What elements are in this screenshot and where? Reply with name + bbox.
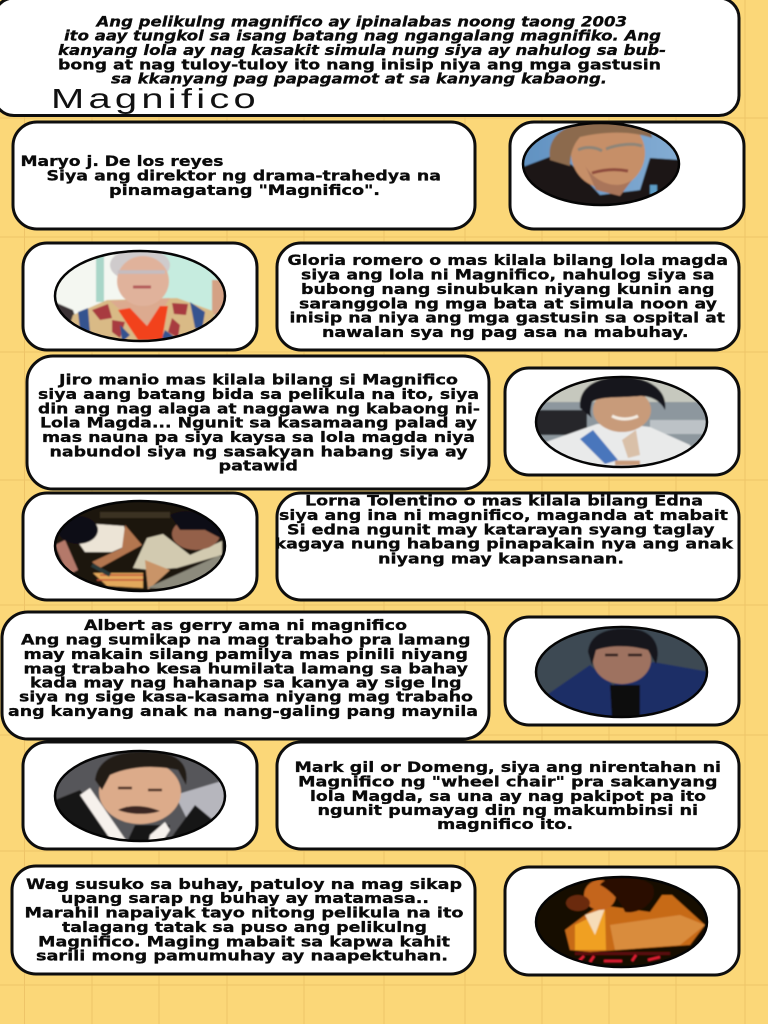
Gloria Romero description: siya ang lola ni Magnifico, nahulog siya sa — [301, 268, 714, 284]
Jiro Manio description: mas nauna pa siya kaysa sa lola magda niya — [42, 430, 475, 446]
intro text: kanyang lola ay nag kasakit simula nung siya ay nahulog sa bub- — [58, 43, 666, 59]
panel: Albert as Gerry photo — [505, 617, 739, 725]
panel: Lorna Tolentino text — [274, 493, 739, 600]
intro text: bong at nag tuloy-tuloy ito nang inisip niya ang mga gastusin — [58, 58, 661, 74]
panel: director text — [13, 122, 475, 229]
panel: Lorna Tolentino photo — [23, 493, 257, 600]
Jiro Manio description: patawid — [218, 458, 298, 474]
Gloria Romero description: inisip na niya ang mga gastusin sa ospital at — [290, 310, 725, 326]
Albert as Gerry description — [8, 618, 478, 720]
Albert as Gerry description: Ang nag sumikap na mag trabaho pra lamang — [21, 632, 470, 648]
Jiro Manio description: siya aang batang bida sa pelikula na ito, siya — [38, 387, 479, 403]
intro text: sa kkanyang pag papagamot at sa kanyang kabaong. — [111, 72, 607, 88]
intro text: ito aay tungkol sa isang batang nag ngangalang magnifiko. Ang — [64, 28, 661, 44]
closing message text: sarili mong pamumuhay ay naapektuhan. — [36, 948, 448, 964]
Jiro Manio description: din ang nag alaga at naggawa ng kabaong ni- — [38, 402, 480, 418]
panel: Albert as Gerry text — [2, 612, 489, 739]
Albert as Gerry description: mag trabaho kesa humilata lamang sa bahay — [24, 662, 468, 678]
Albert as Gerry description: kada may nag hahanap sa kanya ay sige lng — [30, 676, 462, 692]
Jiro Manio description: Jiro manio mas kilala bilang si Magnifico — [58, 372, 458, 388]
Albert as Gerry description: Albert as gerry ama ni magnifico — [84, 618, 407, 634]
photo: Gloria Romero portrait — [50, 248, 230, 346]
closing message text: Marahil napaiyak tayo nitong pelikula na ito — [24, 906, 464, 922]
closing message text: upang sarap ng buhay ay matamasa.. — [61, 891, 429, 907]
Gloria Romero description — [288, 253, 728, 341]
Lorna Tolentino description: siya ang ina ni magnifico, maganda at mabait — [279, 508, 728, 524]
director description: Siya ang direktor ng drama-trahedya na — [46, 168, 441, 184]
panel: Gloria Romero photo — [23, 243, 257, 350]
Gloria Romero description: Gloria romero o mas kilala bilang lola magda — [288, 253, 728, 269]
photo: Jiro Manio portrait — [534, 376, 708, 468]
Mark Gil description: magnifico ito. — [437, 817, 573, 833]
panel: intro — [0, 0, 739, 116]
photo: director portrait — [522, 122, 680, 206]
director description: Maryo j. De los reyes — [20, 154, 223, 170]
Albert as Gerry description: may makain silang pamilya mas pinili niyang — [24, 647, 468, 663]
Mark Gil description: ngunit pumayag din ng makumbinsi ni — [318, 803, 698, 819]
intro text: Ang pelikulng magnifico ay ipinalabas noong taong 2003 — [95, 14, 627, 30]
Mark Gil description — [294, 760, 721, 833]
photo: Mark Gil portrait — [50, 748, 230, 846]
Lorna Tolentino description: Si edna ngunit may katarayan syang taglay — [287, 522, 714, 538]
Lorna Tolentino description: niyang may kapansanan. — [378, 552, 624, 568]
Albert as Gerry description: ang kanyang anak na nang-galing pang maynila — [8, 704, 478, 720]
panel: Mark Gil text — [277, 742, 739, 849]
photo: Albert Martinez portrait — [530, 622, 712, 720]
intro text — [58, 14, 666, 88]
panel: closing message — [12, 866, 475, 974]
heading: Magnifico: Magnifico — [51, 83, 260, 114]
Gloria Romero description: nawalan sya ng pag asa na mabuhay. — [322, 325, 688, 341]
panel: Mark Gil photo — [23, 742, 257, 849]
Jiro Manio description: Lola Magda... Ngunit sa kasamaang palad ay — [40, 416, 477, 432]
closing message text: Magnifico. Maging mabait sa kapwa kahit — [38, 934, 450, 950]
Lorna Tolentino description — [274, 494, 734, 568]
panel: Gloria Romero text — [277, 243, 739, 350]
Mark Gil description: Magnifico ng "wheel chair" pra sakanyang — [298, 774, 718, 790]
director description — [20, 154, 441, 199]
Jiro Manio description — [38, 372, 480, 474]
Lorna Tolentino description: kagaya nung habang pinapakain nya ang anak — [274, 536, 734, 552]
director description: pinamagatang "Magnifico". — [109, 183, 380, 199]
Gloria Romero description: saranggola ng mga bata at simula noon ay — [299, 296, 717, 312]
closing message text — [24, 877, 464, 964]
closing message text: talagang tatak sa puso ang pelikulng — [62, 920, 427, 936]
photo: Magnifico film poster — [530, 872, 712, 970]
panel: film poster photo — [505, 867, 739, 975]
Jiro Manio description: nabundol siya ng sasakyan habang siya ay — [50, 444, 468, 460]
Mark Gil description: lola Magda, sa una ay nag pakipot pa ito — [310, 789, 706, 805]
panel: director photo — [510, 117, 744, 229]
Lorna Tolentino description: Lorna Tolentino o mas kilala bilang Edna — [305, 494, 703, 510]
Mark Gil description: Mark gil or Domeng, siya ang nirentahan ni — [294, 760, 721, 776]
panel: Jiro Manio photo — [505, 368, 739, 475]
panel: Jiro Manio text — [27, 356, 489, 489]
Albert as Gerry description: siya ng sige kasa-kasama niyang mag trabaho — [19, 690, 473, 706]
Gloria Romero description: bubong nang sinubukan niyang kunin ang — [301, 282, 714, 298]
closing message text: Wag susuko sa buhay, patuloy na mag sikap — [26, 877, 462, 893]
photo: Lorna Tolentino scene — [50, 498, 230, 596]
